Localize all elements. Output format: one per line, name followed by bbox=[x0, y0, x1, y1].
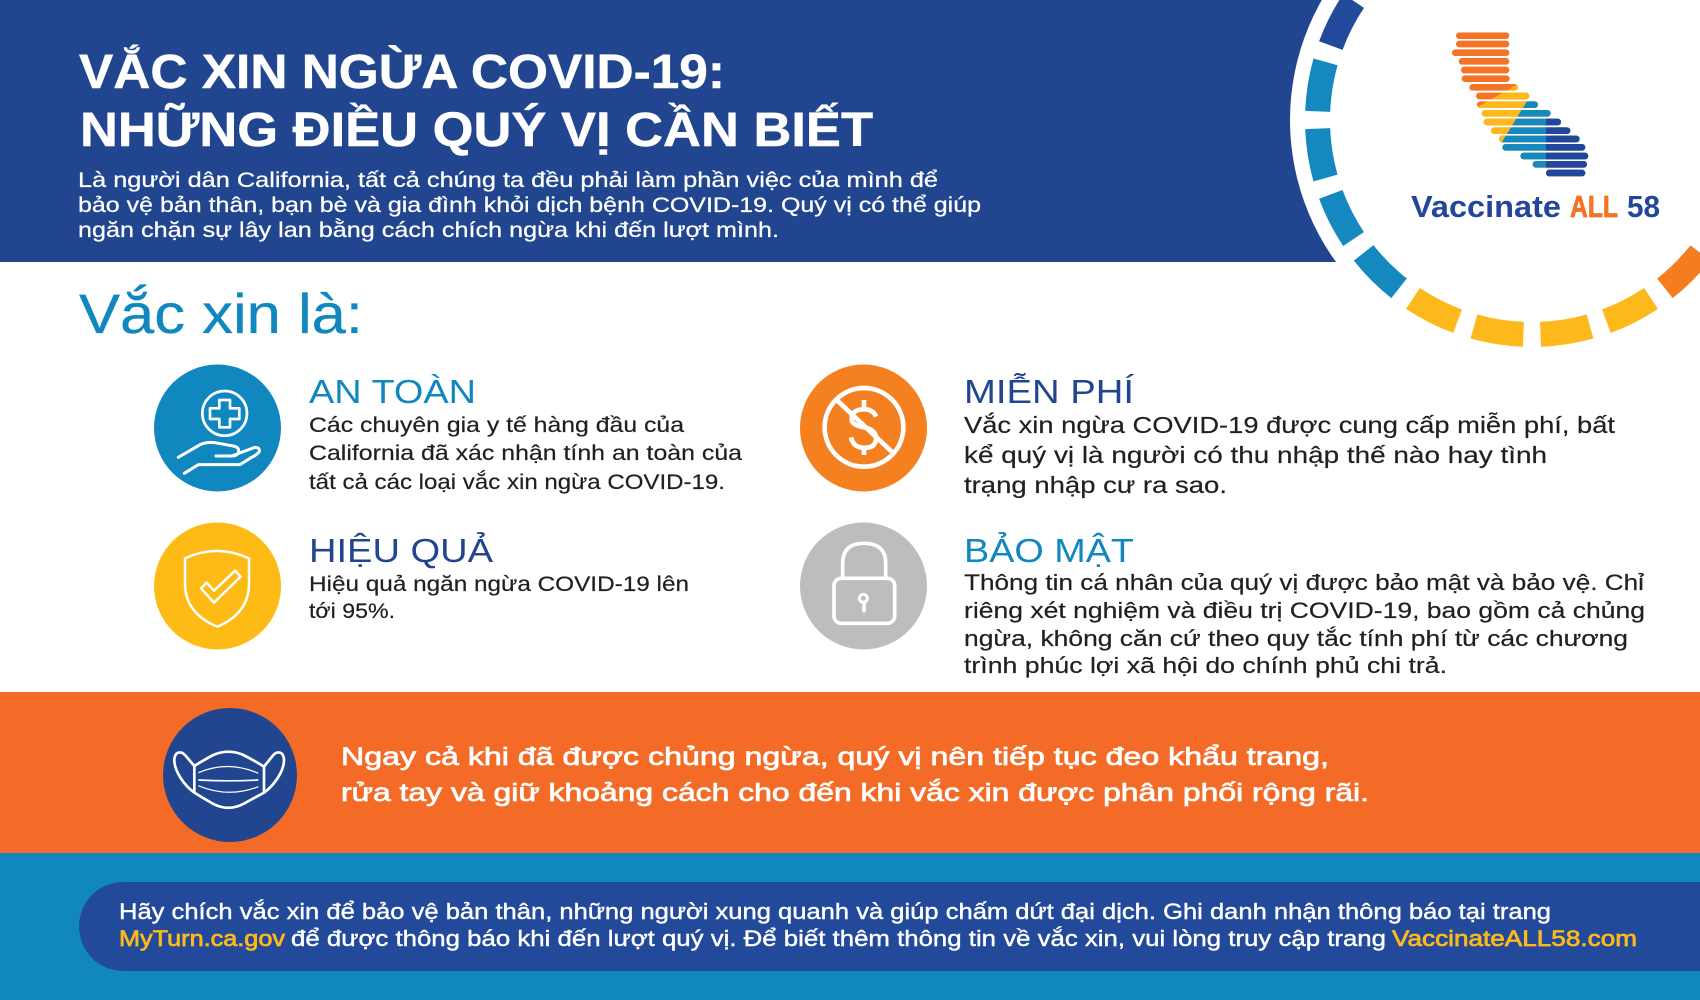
logo wordmark: 58 bbox=[1627, 189, 1660, 224]
item: safe: AN TOÀN bbox=[309, 373, 476, 410]
item: free: kể quý vị là người có thu nhập thế nào hay tình bbox=[964, 442, 1547, 468]
item: private: Thông tin cá nhân của quý vị được bảo mật và bảo vệ. Chỉ bbox=[964, 570, 1644, 595]
mask message: rửa tay và giữ khoảng cách cho đến khi vắc xin được phân phối rộng rãi. bbox=[341, 778, 1369, 807]
item: free: trạng nhập cư ra sao. bbox=[964, 472, 1227, 498]
logo wordmark bbox=[1411, 189, 1660, 224]
call to action text: để được thông báo khi đến lượt quý vị. Để biết thêm thông tin về vắc xin, vui lòng truy cập trang bbox=[291, 926, 1386, 951]
title: VẮC XIN NGỪA COVID-19: bbox=[79, 44, 725, 99]
logo ring bbox=[1231, 0, 1700, 421]
blue band bbox=[0, 853, 1700, 1000]
item: private: BẢO MẬT bbox=[964, 532, 1134, 569]
call to action text: VaccinateALL58.com bbox=[1392, 926, 1637, 951]
call to action text: MyTurn.ca.gov bbox=[119, 926, 285, 951]
item: private: riêng xét nghiệm và điều trị COVID-19, bao gồm cả chủng bbox=[964, 598, 1645, 623]
item: effective: Hiệu quả ngăn ngừa COVID-19 lên bbox=[309, 572, 689, 596]
logo wordmark: ALL bbox=[1570, 189, 1618, 224]
icon: padlock bbox=[800, 522, 927, 650]
intro text: Là người dân California, tất cả chúng ta đều phải làm phần việc của mình để bbox=[78, 168, 938, 192]
item: private: trình phúc lợi xã hội do chính phủ chi trả. bbox=[964, 653, 1447, 678]
item: effective: tới 95%. bbox=[309, 599, 395, 623]
item: effective bbox=[309, 532, 689, 623]
mask message bbox=[341, 743, 1369, 807]
intro text: ngăn chặn sự lây lan bằng cách chích ngừa khi đến lượt mình. bbox=[78, 217, 779, 242]
icon: no dollar sign bbox=[800, 364, 927, 492]
item: safe: tất cả các loại vắc xin ngừa COVID-19. bbox=[309, 469, 725, 494]
title bbox=[79, 44, 873, 157]
item: effective: HIỆU QUẢ bbox=[309, 532, 493, 569]
call to action text: Hãy chích vắc xin để bảo vệ bản thân, những người xung quanh và giúp chấm dứt đại dịch. Ghi danh nhận thông báo tại trang bbox=[119, 899, 1551, 924]
icon: shield with check bbox=[154, 522, 281, 650]
item: safe bbox=[309, 373, 742, 494]
intro text bbox=[78, 168, 981, 242]
orange band bbox=[0, 692, 1700, 853]
item: free bbox=[964, 373, 1616, 498]
item: safe: California đã xác nhận tính an toàn của bbox=[309, 441, 742, 465]
item: private bbox=[964, 532, 1645, 678]
call to action pill bbox=[79, 882, 1700, 971]
icon: safe hand with medical cross bbox=[154, 364, 281, 492]
mask message: Ngay cả khi đã được chủng ngừa, quý vị nên tiếp tục đeo khẩu trang, bbox=[341, 743, 1329, 771]
logo: California stripes bbox=[1452, 32, 1588, 176]
icon: face mask bbox=[163, 708, 297, 842]
logo wordmark: Vaccinate bbox=[1411, 189, 1561, 224]
item: free: Vắc xin ngừa COVID-19 được cung cấp miễn phí, bất bbox=[964, 412, 1616, 438]
section heading: Vắc xin là: bbox=[79, 282, 363, 345]
item: private: ngừa, không căn cứ theo quy tắc tính phí từ các chương bbox=[964, 626, 1628, 651]
item: safe: Các chuyên gia y tế hàng đầu của bbox=[309, 413, 684, 437]
title: NHỮNG ĐIỀU QUÝ VỊ CẦN BIẾT bbox=[80, 102, 873, 157]
header banner bbox=[0, 0, 1700, 362]
item: free: MIỄN PHÍ bbox=[964, 373, 1135, 410]
intro text: bảo vệ bản thân, bạn bè và gia đình khỏi dịch bệnh COVID-19. Quý vị có thể giúp bbox=[78, 193, 981, 217]
call to action text bbox=[119, 899, 1637, 951]
